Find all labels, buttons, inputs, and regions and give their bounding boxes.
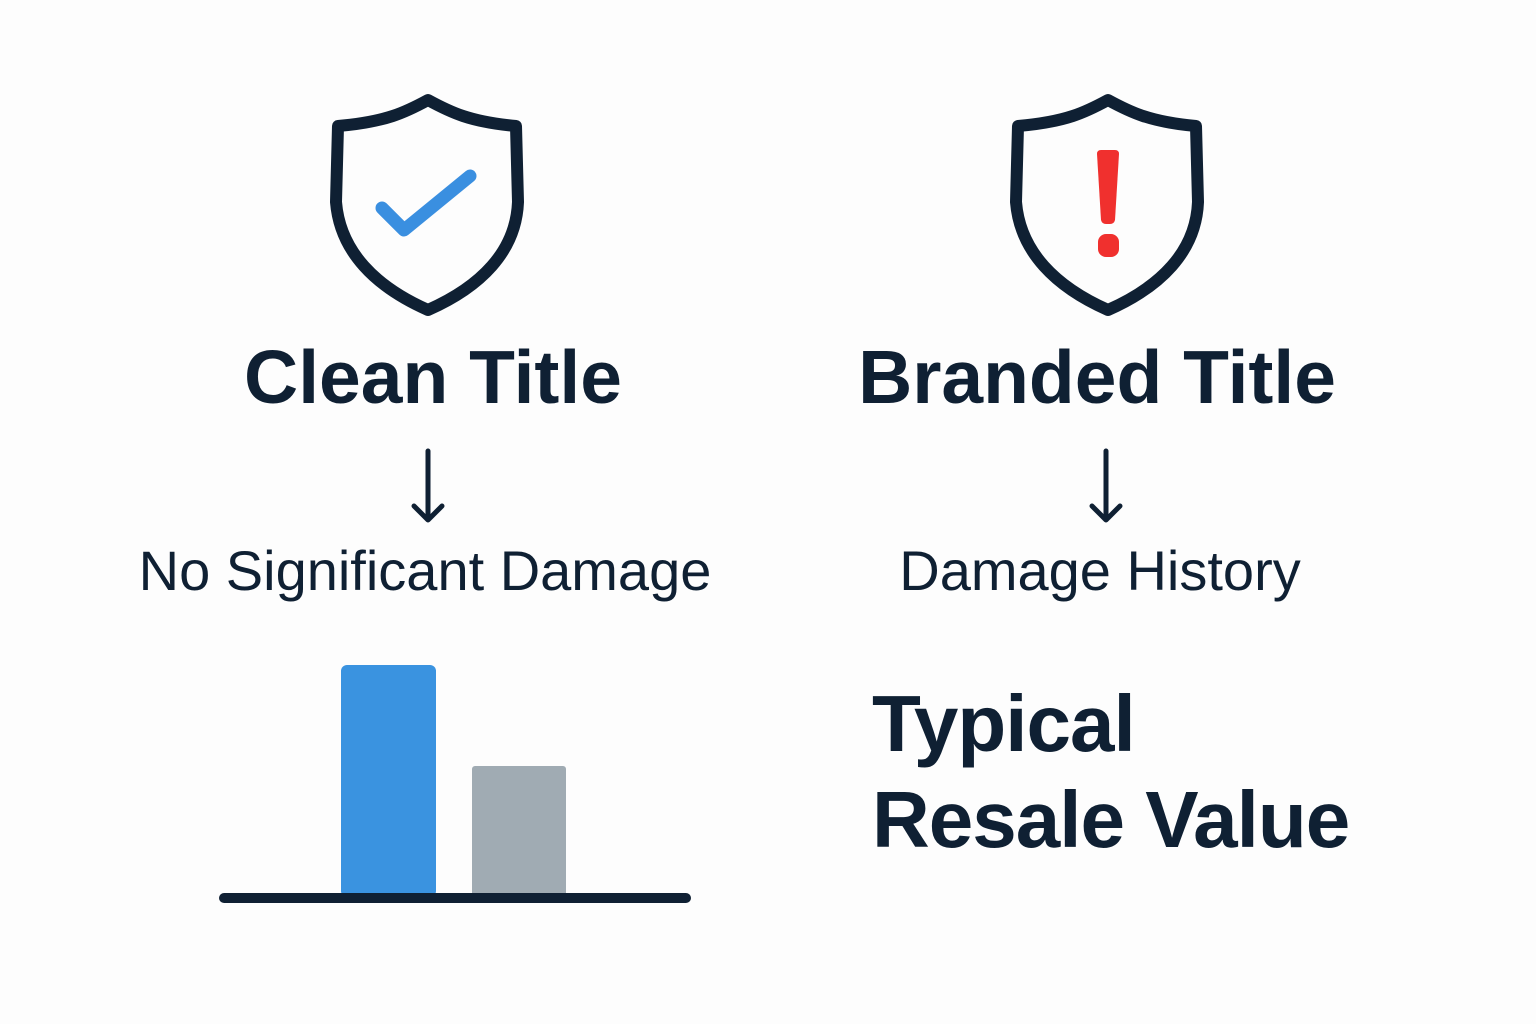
heading: clean title: Clean Title bbox=[244, 335, 622, 419]
arrow: branded bbox=[1090, 448, 1122, 522]
icon: shield with exclamation bbox=[1010, 94, 1204, 316]
arrow: clean bbox=[412, 448, 444, 522]
text: typical resale value: Typical bbox=[872, 679, 1135, 768]
text: damage history: Damage History bbox=[899, 539, 1301, 602]
text: typical resale value bbox=[872, 679, 1349, 864]
bar chart bbox=[219, 665, 691, 903]
heading: branded title: Branded Title bbox=[858, 335, 1336, 419]
text: typical resale value: Resale Value bbox=[872, 775, 1349, 864]
icon: shield with check bbox=[330, 94, 524, 316]
text: no significant damage: No Significant Damage bbox=[139, 539, 711, 602]
